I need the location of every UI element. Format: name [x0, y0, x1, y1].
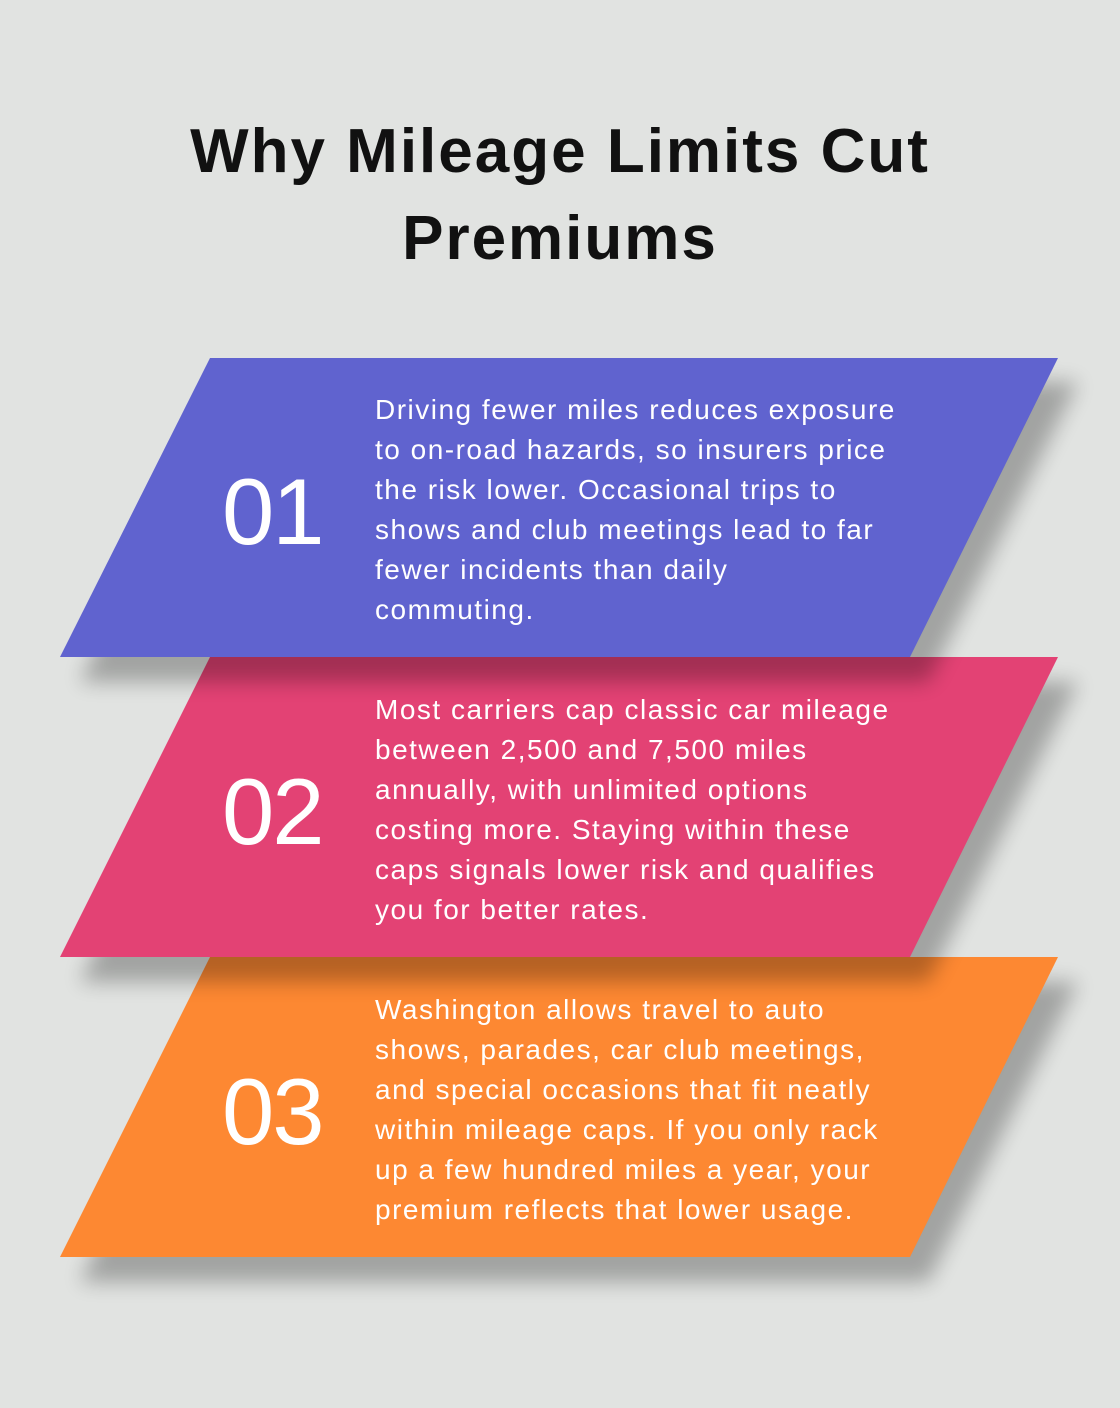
text 01: [375, 394, 896, 625]
text 03: shows, parades, car club meetings,: [375, 1034, 865, 1065]
number 01: 01: [222, 459, 323, 564]
panel shape: 1: [60, 358, 1078, 682]
text 03: up a few hundred miles a year, your: [375, 1154, 871, 1185]
text 02: costing more. Staying within these: [375, 814, 851, 845]
text 01: to on-road hazards, so insurers price: [375, 434, 886, 465]
text 01: Driving fewer miles reduces exposure: [375, 394, 896, 425]
number 03: 03: [222, 1059, 323, 1164]
title: [190, 117, 930, 273]
text 02: between 2,500 and 7,500 miles: [375, 734, 808, 765]
text 03: and special occasions that fit neatly: [375, 1074, 871, 1105]
text 03: Washington allows travel to auto: [375, 994, 825, 1025]
title: Premiums: [402, 204, 718, 273]
text 02: Most carriers cap classic car mileage: [375, 694, 890, 725]
text 02: caps signals lower risk and qualifies: [375, 854, 876, 885]
text 01: fewer incidents than daily: [375, 554, 728, 585]
text 02: [375, 694, 890, 925]
text 02: annually, with unlimited options: [375, 774, 808, 805]
title: Why Mileage Limits Cut: [190, 117, 930, 186]
panel shape: 3: [60, 957, 1078, 1282]
text 01: commuting.: [375, 594, 535, 625]
text 03: within mileage caps. If you only rack: [375, 1114, 879, 1145]
panel shape: 2: [60, 657, 1078, 982]
text 03: premium reflects that lower usage.: [375, 1194, 854, 1225]
text 01: shows and club meetings lead to far: [375, 514, 874, 545]
number 02: 02: [222, 759, 323, 864]
text 02: you for better rates.: [375, 894, 649, 925]
text 01: the risk lower. Occasional trips to: [375, 474, 837, 505]
text 03: [375, 994, 879, 1225]
